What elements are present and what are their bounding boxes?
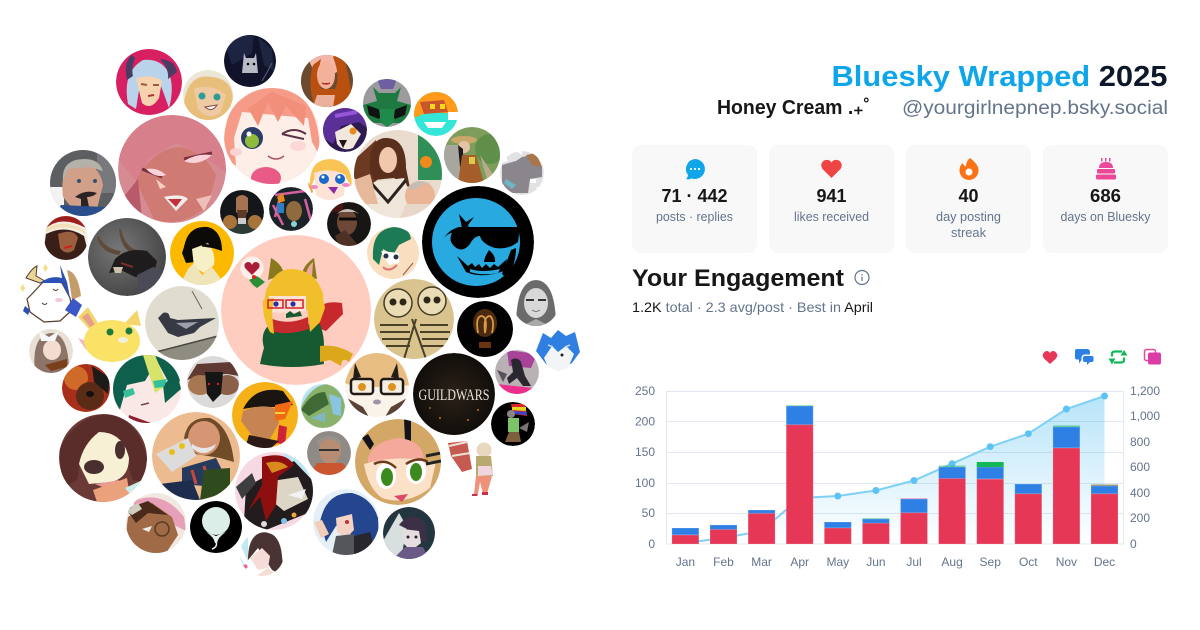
avatar: dark figure with white face bbox=[224, 35, 276, 87]
month labels: Jul bbox=[906, 555, 922, 569]
avatar: blonde chibi with blue eyes bbox=[308, 159, 352, 203]
month labels: May bbox=[826, 555, 849, 569]
avatar: yellow round creature bbox=[78, 307, 141, 362]
avatar: pigeon bbox=[145, 286, 219, 360]
green repost segments bbox=[786, 405, 1118, 519]
stat card: posts and replies bbox=[632, 145, 757, 253]
stat card: posts and replies: posts · replies bbox=[656, 210, 733, 224]
title: Bluesky Wrapped 2025 bbox=[832, 61, 1168, 93]
avatar: glasses girl with dark horns bbox=[345, 353, 409, 417]
engagement summary: 1.2K total · 2.3 avg/post · Best in April bbox=[632, 299, 873, 315]
cumulative line bbox=[685, 396, 1104, 543]
avatar: green lizard bbox=[299, 384, 345, 430]
month labels: Mar bbox=[751, 555, 772, 569]
left axis labels bbox=[635, 384, 655, 551]
cumulative points bbox=[834, 392, 1108, 500]
month labels: Jun bbox=[866, 555, 886, 569]
avatar: main character in green sack bbox=[221, 235, 371, 385]
stat card: likes received bbox=[769, 145, 894, 253]
legend icon: likes bbox=[1043, 351, 1057, 364]
avatar: blonde with teal eyes bbox=[183, 70, 233, 120]
right axis labels bbox=[1130, 384, 1160, 551]
month labels bbox=[676, 555, 1115, 569]
legend icon: reposts bbox=[1108, 350, 1128, 364]
icon: chat bubble bbox=[686, 159, 705, 179]
left axis labels: 250 bbox=[635, 384, 655, 398]
stat card: day posting streak: streak bbox=[951, 226, 987, 240]
red like bars bbox=[672, 425, 1118, 544]
avatar: colorful neon-haired girl bbox=[269, 187, 313, 231]
avatar: pink hat with glasses bbox=[126, 493, 186, 553]
right axis labels: 800 bbox=[1130, 435, 1150, 449]
avatar: elf with dark background bbox=[383, 507, 435, 559]
icon: flame bbox=[960, 158, 979, 180]
left axis labels: 150 bbox=[635, 445, 655, 459]
avatar collage bbox=[20, 35, 580, 576]
legend icon: quotes bbox=[1144, 350, 1161, 364]
avatar: horned girl with green eyes bbox=[355, 419, 441, 505]
month labels: Feb bbox=[713, 555, 734, 569]
avatar: green-haired girl bbox=[367, 227, 419, 279]
avatar: character with rainbow flag bbox=[491, 402, 535, 446]
icon: heart bbox=[821, 160, 842, 178]
chart grid bbox=[666, 391, 1124, 544]
avatar: glowing light bulb bbox=[457, 301, 513, 357]
left axis labels: 0 bbox=[648, 537, 655, 551]
avatar: bearded man bbox=[220, 190, 264, 234]
right axis labels: 1,200 bbox=[1130, 384, 1160, 398]
avatar: red panda girl sprite bbox=[448, 441, 493, 496]
left axis labels: 200 bbox=[635, 414, 655, 428]
stat card: day posting streak bbox=[906, 145, 1031, 253]
avatar: winking pink-haired girl bbox=[224, 88, 320, 189]
avatar: girl in straw hat bbox=[444, 127, 505, 183]
avatar: grayscale woman with glasses bbox=[516, 280, 556, 326]
handle: @yourgirlnepnep.bsky.social bbox=[902, 98, 1168, 119]
avatar: red dog close-up bbox=[62, 364, 110, 412]
stat card: day posting streak: 40 bbox=[958, 186, 978, 206]
month labels: Sep bbox=[980, 555, 1001, 569]
cumulative area bbox=[685, 396, 1104, 544]
stat card: likes received: 941 bbox=[816, 186, 846, 206]
avatar: man with goatee bbox=[50, 150, 117, 216]
right axis labels: 600 bbox=[1130, 460, 1150, 474]
month labels: Oct bbox=[1019, 555, 1038, 569]
avatar: woman with santa hat bbox=[44, 216, 88, 260]
month labels: Aug bbox=[941, 555, 963, 569]
icon: info bbox=[855, 270, 869, 284]
stat card: day posting streak: day posting bbox=[936, 210, 1001, 224]
icon: birthday cake bbox=[1096, 158, 1116, 180]
stat card: days on Bluesky: days on Bluesky bbox=[1060, 210, 1151, 224]
avatar: silver-haired demon girl bbox=[116, 49, 182, 115]
avatar: purple-haired girl bbox=[323, 108, 367, 152]
avatar: woman in white dress with old man bbox=[354, 130, 442, 218]
avatar: gray pixel creature bbox=[500, 151, 544, 195]
left axis labels: 50 bbox=[642, 506, 655, 520]
legend icon: replies bbox=[1075, 349, 1094, 365]
avatar: dark horned mask on gray bbox=[88, 218, 166, 296]
right axis labels: 0 bbox=[1130, 537, 1137, 551]
blue reply bars bbox=[672, 406, 1118, 535]
month labels: Nov bbox=[1056, 555, 1077, 569]
avatar: red-haired jester bbox=[235, 452, 313, 530]
avatar: pale mask girl with brown hair bbox=[59, 414, 147, 502]
avatar: Guild Wars logo: GUILDWARS bbox=[418, 387, 490, 404]
right axis labels: 1,000 bbox=[1130, 409, 1160, 423]
left axis labels: 100 bbox=[635, 476, 655, 490]
combo chart bbox=[635, 384, 1160, 569]
avatar: skeleton couple bbox=[374, 279, 454, 359]
avatar: Guild Wars logo bbox=[413, 353, 495, 435]
avatar: dark masked figure bbox=[187, 356, 239, 408]
stat card: days on Bluesky: 686 bbox=[1090, 186, 1121, 206]
avatar: pink-haired anime close-up bbox=[118, 115, 226, 223]
right axis labels: 200 bbox=[1130, 511, 1150, 525]
heading: Your Engagement: Your Engagement bbox=[632, 265, 844, 292]
avatar: blue and white fox bbox=[536, 330, 580, 371]
avatar: cyan smiling monster bbox=[414, 92, 458, 136]
avatar: blue skull with sunglasses bbox=[422, 186, 534, 298]
avatar: green-haired anime girl bbox=[113, 355, 181, 425]
avatar: blue-haired girl bbox=[313, 489, 379, 555]
avatar: orange-accent man on yellow bbox=[232, 382, 298, 448]
avatar: figure on pink and gray bbox=[495, 350, 539, 396]
avatar: white balloon on black bbox=[190, 501, 242, 553]
right axis labels: 400 bbox=[1130, 486, 1150, 500]
display name: Honey Cream .₊˚ bbox=[717, 96, 870, 119]
stat card: posts and replies: 71 · 442 bbox=[662, 186, 728, 206]
chart legend bbox=[1043, 349, 1161, 365]
avatar: dark-haired girl in red glasses bbox=[240, 532, 284, 576]
avatar: man with playing cards bbox=[152, 412, 240, 500]
avatar: red-haired woman bbox=[301, 55, 353, 107]
avatar: green robot mask bbox=[363, 79, 411, 127]
avatar: white cat with blue hood bbox=[20, 264, 82, 322]
stat card: likes received: likes received bbox=[794, 210, 869, 224]
month labels: Jan bbox=[676, 555, 695, 569]
stat card: days on Bluesky bbox=[1043, 145, 1168, 253]
month labels: Apr bbox=[790, 555, 809, 569]
avatar: black-haired girl on yellow bbox=[170, 221, 234, 285]
avatar: girl with violin bbox=[29, 329, 73, 373]
month labels: Dec bbox=[1094, 555, 1115, 569]
avatar: man in dark room bbox=[327, 202, 371, 246]
avatar: older man with glasses bbox=[307, 431, 351, 475]
